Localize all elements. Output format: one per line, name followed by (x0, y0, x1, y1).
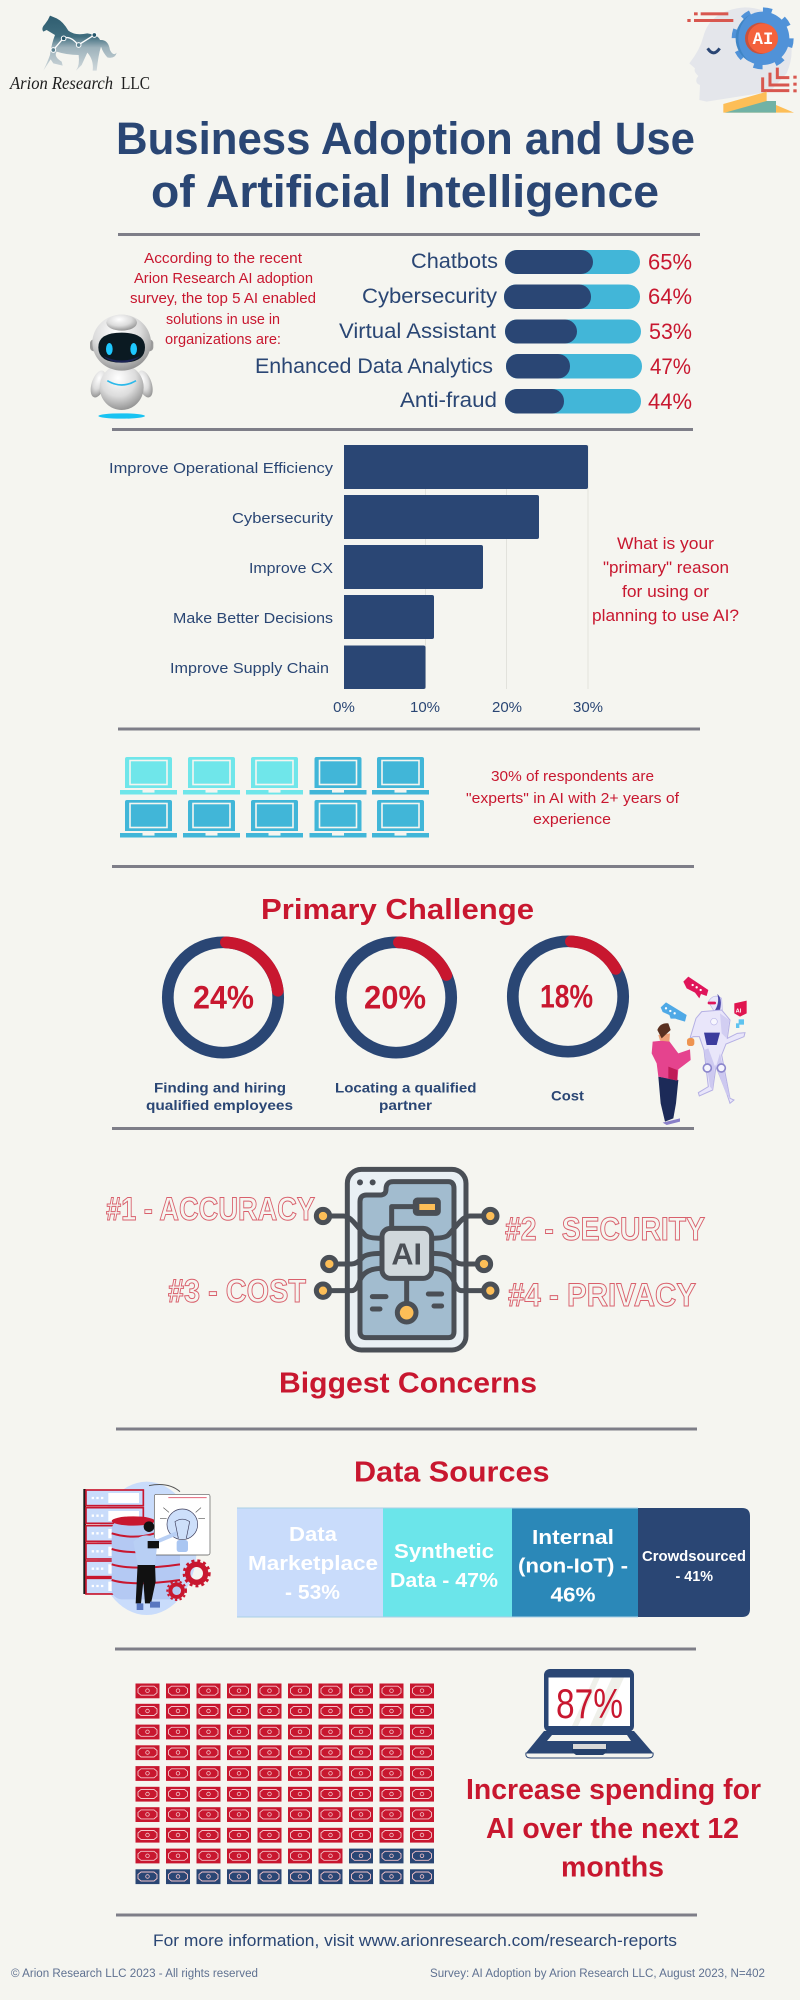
row: Chatbots: 65% (648, 250, 692, 274)
donut captions: Finding and hiring (154, 1080, 286, 1096)
category labels: Cybersecurity (232, 510, 334, 527)
text: experts: "experts" in AI with 2+ years of (466, 790, 680, 807)
segment: Internal: (non-IoT) - (518, 1556, 628, 1578)
text: increase spending (466, 1774, 761, 1884)
row: Virtual Assistant (339, 319, 692, 344)
axis labels: 30% (573, 699, 603, 716)
bars (344, 445, 588, 689)
segment: Crowdsourced (642, 1548, 746, 1585)
outline labels: concerns: #3 - COST (168, 1273, 306, 1309)
pictogram: money 87 of 100 (136, 1684, 434, 1884)
row: Virtual Assistant: Virtual Assistant (339, 320, 496, 343)
text: more information: For more information, visit www.arionresearch.com/research-reports (153, 1931, 677, 1950)
row: Cybersecurity: Cybersecurity (362, 285, 498, 308)
icon: AI circuit device (316, 1169, 497, 1350)
icon: AI head (687, 7, 797, 113)
heading: Data Sources: Data Sources (354, 1456, 550, 1488)
segment: Data Marketplace (248, 1524, 378, 1604)
row: Enhanced Data Analytics: 47% (650, 354, 691, 379)
axis labels: 20% (492, 699, 522, 716)
segment: Crowdsourced: Crowdsourced (642, 1548, 746, 1565)
text: survey intro: solutions in use in (166, 311, 280, 328)
row: Chatbots: Chatbots (411, 250, 498, 273)
title: of Artificial Intelligence (151, 166, 659, 217)
stacked bar: data sources (237, 1508, 750, 1617)
text: experts: experience (533, 811, 611, 828)
chart: top 5 AI solutions (255, 250, 692, 414)
segment: Synthetic Data: Data - 47% (390, 1570, 498, 1592)
category labels (109, 460, 334, 677)
outline labels: concerns: #1 - ACCURACY (106, 1191, 315, 1227)
illustration: data servers and person (83, 1482, 210, 1615)
row: Virtual Assistant: 53% (649, 319, 692, 344)
donut: 24% (168, 942, 278, 1053)
category labels: Improve Supply Chain (170, 660, 329, 677)
icon: laptop with 87% (526, 1669, 653, 1758)
heading: Biggest Concerns: Biggest Concerns (279, 1368, 537, 1400)
icon: AI circuit device: AI (391, 1238, 422, 1272)
title (116, 113, 695, 217)
donut captions: partner (379, 1097, 433, 1113)
outline labels: concerns: #2 - SECURITY (505, 1211, 705, 1247)
axis labels: 10% (410, 699, 440, 716)
footer: survey source: Survey: AI Adoption by Arion Research LLC, August 2023, N=402 (430, 1968, 765, 1980)
illustration: person shaking hands with robot: AI (736, 1008, 742, 1014)
text: survey intro: organizations are: (165, 331, 281, 348)
donut captions (146, 1080, 584, 1113)
donut captions: qualified employees (146, 1097, 293, 1113)
chart: primary reason for using AI (109, 445, 603, 716)
row: Anti-fraud: 44% (648, 389, 692, 414)
text: survey intro (130, 250, 316, 348)
text: question: for using or (622, 582, 709, 601)
donut: 18%: 18% (540, 978, 593, 1014)
category labels: Make Better Decisions (173, 610, 333, 627)
text: experts: 30% of respondents are (491, 768, 654, 785)
donut: 20% (341, 942, 451, 1053)
text: increase spending: Increase spending for (466, 1774, 761, 1806)
heading: Primary Challenge: Primary Challenge (261, 894, 534, 926)
segment: Internal (518, 1527, 628, 1606)
text: survey intro: Arion Research AI adoption (134, 270, 313, 287)
row: Enhanced Data Analytics (255, 354, 691, 379)
text: increase spending: months (561, 1852, 664, 1884)
segment: Synthetic Data (390, 1541, 498, 1592)
title: Business Adoption and Use (116, 113, 695, 164)
row: Enhanced Data Analytics: Enhanced Data Analytics (255, 355, 493, 378)
icon: horse (42, 16, 117, 71)
icon: robot (88, 315, 156, 419)
category labels: Improve CX (249, 560, 333, 577)
row: Cybersecurity (362, 284, 692, 309)
illustration: person shaking hands with robot (652, 977, 747, 1125)
row: Anti-fraud: Anti-fraud (400, 389, 497, 412)
segment: Data Marketplace: Marketplace (248, 1553, 378, 1575)
segment: Internal: Internal (532, 1527, 614, 1549)
text: question (592, 534, 739, 625)
logo wordmark: LLC (121, 73, 150, 93)
row: Chatbots (411, 250, 692, 274)
outline labels: concerns (106, 1191, 705, 1313)
row: Anti-fraud (400, 389, 692, 414)
text: experts (466, 768, 680, 828)
text: survey intro: According to the recent (144, 250, 303, 267)
donut captions: Locating a qualified (335, 1080, 476, 1096)
text: question: What is your (617, 534, 714, 553)
donut: 18% (513, 941, 623, 1052)
footer: copyright: © Arion Research LLC 2023 - All rights reserved (11, 1968, 258, 1980)
segment: Synthetic Data: Synthetic (394, 1541, 494, 1563)
logo wordmark: Arion Research (9, 73, 113, 93)
logo: Arion Research LLC (9, 16, 150, 93)
segment: Internal: 46% (550, 1584, 596, 1606)
outline labels: concerns: #4 - PRIVACY (508, 1277, 696, 1313)
segment: Data Marketplace: - 53% (285, 1582, 340, 1604)
text: question: "primary" reason (603, 558, 729, 577)
axis labels: 0% (333, 699, 355, 716)
icon: AI head: AI (753, 30, 773, 50)
text: question: planning to use AI? (592, 606, 739, 625)
donut: 20%: 20% (364, 980, 426, 1016)
donut: 24%: 24% (193, 980, 254, 1016)
category labels: Improve Operational Efficiency (109, 460, 334, 477)
text: survey intro: survey, the top 5 AI enabled (130, 290, 316, 307)
axis labels (333, 699, 603, 716)
text: increase spending: AI over the next 12 (486, 1813, 739, 1845)
segment: Data Marketplace: Data (289, 1524, 338, 1546)
donut captions: Cost (551, 1088, 584, 1104)
icon: laptop with 87%: 87% (556, 1680, 623, 1727)
segment: Crowdsourced: - 41% (676, 1568, 713, 1585)
row: Cybersecurity: 64% (648, 284, 692, 309)
pictogram: laptops 3 of 10 (120, 757, 429, 838)
